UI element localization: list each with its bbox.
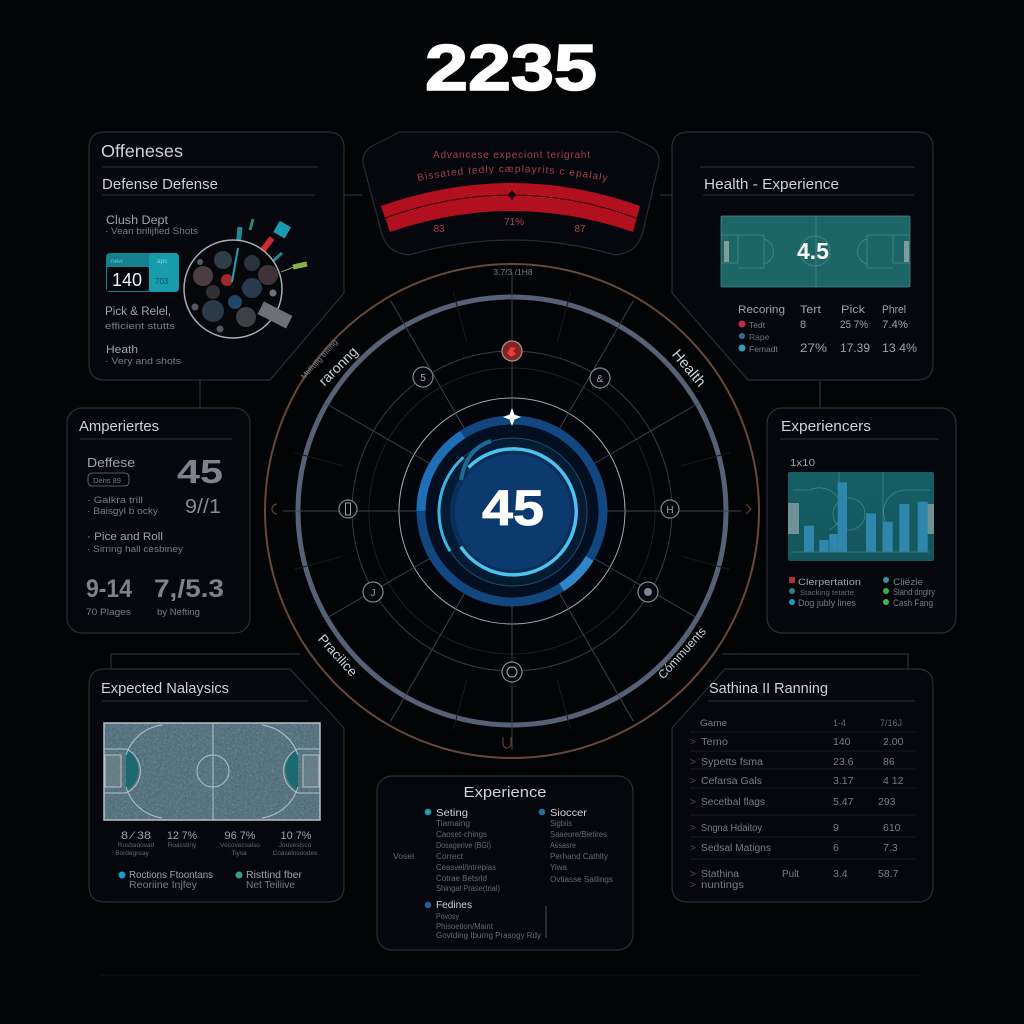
stamina table: Sypetts fsma [701,757,763,768]
red arc band [381,183,640,232]
bullet list: · Sirring hall cesbiney [87,544,184,554]
panel: health experience [672,132,933,380]
stat widget 140: apc [157,258,168,265]
stamina table [690,718,915,891]
stamina table: > [690,797,696,808]
list: soccer [539,808,613,884]
pitch stats: Jouvestsco [279,842,312,849]
gauge value: 45 [482,480,544,536]
bullet list [87,495,184,554]
speckled pitch [104,723,320,820]
data table: 8 [800,319,806,331]
stamina table: 610 [883,822,901,834]
ring label: practice: Pracilice [315,631,360,679]
gauge labels: 71% [504,217,524,228]
legend: Dog jubly lines [798,598,856,608]
stat widget 140 [106,253,179,292]
data table: Phrel [882,304,906,316]
text block: health: Heath [106,344,138,356]
data table: Pick [841,304,866,316]
pitch legend: Risttind fber [246,869,302,881]
defense label: Dens 89 [93,476,121,485]
data table: Tedt [749,320,766,330]
text block: pick and roll: efficient stutts [105,321,175,332]
heading: experience: Experience [464,784,546,801]
stamina table: > [690,880,696,891]
list: features: Phisoetion/Maint [436,922,494,931]
white inner ring [399,398,625,624]
stamina table: 140 [833,736,851,748]
stat widget 140: 140 [112,270,142,290]
stat 45: 45 [177,453,223,490]
list: features [425,900,546,940]
data table: 17.39 [840,341,870,355]
stamina table: Cefarsa Gals [701,776,762,787]
text block: clush dept: Clush Dept [106,215,169,227]
stat widget 140: 703 [155,277,169,286]
stamina table: 86 [883,756,895,768]
stamina table: 1-4 [833,718,846,728]
legend: Sland dnglry [893,587,935,597]
stamina table: 293 [878,796,896,808]
list: setting: Seting [436,808,468,819]
stamina table: 2.00 [883,736,904,748]
gauge icons: & [597,374,604,385]
stamina table: 3.17 [833,775,854,787]
stat 9-14: 70 Plages [86,607,131,618]
short ring spokes [399,398,625,624]
pitch stats: Rusbanovad [118,842,155,849]
list: soccer: Yiwa [550,863,568,872]
radial gauge [265,264,759,758]
list: soccer: Assasre [550,841,576,850]
stamina table: 9 [833,822,839,834]
gauge spokes [283,272,741,750]
legend: Cliëzle [893,577,923,587]
pitch stats: Tiysa [231,850,247,857]
data table [738,304,917,355]
bar chart on pitch [788,472,934,561]
heading: stamina running: Sathina II Ranning [709,681,828,697]
soccer pitch [721,216,910,287]
list: soccer: Saaeure/Bietires [550,830,607,839]
stamina table: Temo [701,737,728,748]
data table: 27% [800,341,827,355]
stamina table: Sedsal Matigns [701,843,771,854]
defense label: Deffese [87,455,135,470]
list: setting: Caoset-chings [436,830,487,839]
red caption: Advancese expeciont terigraht [433,150,590,161]
stat 7,/5.3: 7,/5.3 [154,575,224,603]
stamina table: > [690,869,696,880]
pitch legend: Reoriine Injfey [129,879,198,891]
pitch stats: Roasstiny [168,842,197,849]
list: soccer: Sigbiis [550,819,572,828]
list: setting: Shingal Prase(trial) [436,884,500,893]
heading: health experience: Health - Experience [704,177,839,193]
stamina table: 23.6 [833,756,854,768]
list: setting: Vosel [393,852,414,861]
list: setting: Correct [436,852,464,861]
list: soccer: Perhand Cathlty [550,852,608,861]
stamina table: Sngna Hdaitoy [701,823,762,834]
list: setting: Ceasvel/intrepias [436,863,496,872]
pitch stats: 12 7% [167,830,197,842]
list: setting: Cotrae Betsrld [436,874,487,883]
ring label top: 3.7/3 /1H8 [493,267,533,277]
stat 9-14: 9-14 [86,575,132,603]
pitch stats: Vecovecsaiso [220,842,260,849]
data table: 7.4% [882,319,908,331]
stamina table: 7.3 [883,842,898,854]
data table: 13 4% [882,341,917,355]
stamina table: 58.7 [878,868,899,880]
list: setting [393,808,500,893]
stamina table: 6 [833,842,839,854]
data table: 25 7% [840,319,868,331]
list: setting: Dosagerive (BGl) [436,841,491,850]
pitch legend: Net Teiliive [246,879,295,891]
gauge labels: 83 [433,224,445,235]
legend [789,577,935,608]
text block: health [105,344,181,367]
stat 9//1: 9//1 [185,496,221,518]
pitch legend: Roctions Ftoontans [129,869,213,881]
gauge icons [339,341,679,682]
stamina table: > [690,823,696,834]
star marker [503,408,521,426]
panel: experiencers [767,408,956,633]
stat 7,/5.3 [154,575,224,618]
pitch value: 4.5 [797,238,829,264]
stamina table: > [690,843,696,854]
gauge icons: 5 [420,373,426,384]
pitch stats [115,830,318,857]
ring label: comments: Cómmuents [655,624,709,682]
stamina table: Stathina [701,869,739,880]
text block: clush dept: · Vean brilijfied Shots [105,226,198,237]
ring label small: Mtilfullg tnlling [299,338,340,381]
stamina table: Pult [782,869,799,880]
chart label: 1x10 [790,457,815,469]
panel: expected analysis [89,669,344,902]
panel: stamina running [672,669,933,902]
text block: pick and roll: Pick & Relel, [105,306,171,318]
gauge icons: H [666,505,674,516]
data table: Recoring [738,304,785,316]
bullet list: · Galkra trill [87,495,143,505]
gauge labels [433,217,586,235]
data table: Tert [800,304,821,316]
list: soccer: Ovtiasse Satlings [550,875,613,884]
red caption curved: Bissated tedly cæplayrits c epalaly [418,164,608,182]
central blue dial [421,408,603,602]
heading: offenses: Offeneses [101,141,183,161]
heading: expected analysis: Expected Nalaysics [101,681,229,697]
panel: offenses [89,132,344,380]
text block: clush dept [105,215,198,237]
panel: experience [377,776,633,950]
pitch stats: 96 7% [224,830,256,842]
stamina table: 5.47 [833,796,854,808]
pitch stats: Bordegreay [115,850,150,857]
list: setting: Tiamaing [436,819,470,828]
stat 7,/5.3: by Nefting [157,607,200,618]
data table: Femadt [749,344,778,354]
legend: Stacking tetarte [800,588,854,597]
stamina table: > [690,757,696,768]
title: 2235 [425,31,597,104]
outer markers [272,504,751,748]
stamina table: 4 12 [883,775,904,787]
stamina table: > [690,776,696,787]
panel: advanced gauge [362,131,660,256]
pitch stats: 8 ⁄ 38 [121,830,151,842]
subheading: defense: Defense Defense [102,176,218,193]
legend: Clerpertation [798,577,861,587]
text block: health: · Very and shots [105,356,181,367]
data table: Rape [749,332,770,342]
list: features: Povosy [436,912,459,921]
legend: Cash Fang [893,598,933,608]
heading: experiencers: Experiencers [781,419,871,435]
bullet list: · Baisgyl b ocky [87,506,159,516]
list: features: Fedines [436,900,472,911]
cluster diagram [184,219,307,338]
gauge rings [265,264,759,758]
connector lines [100,195,920,975]
gauge labels: 87 [574,224,586,235]
list: features: Govtding Iburng Prasogy Rdy [436,931,541,940]
stamina table: > [690,737,696,748]
defense label [87,455,135,486]
ring label: health: Health [668,346,709,390]
bullet list: · Pice and Roll [87,531,163,543]
stamina table: Game [700,718,727,728]
pitch legend [118,869,302,891]
stat widget 140: new [111,258,123,265]
pitch stats: 10 7% [280,830,312,842]
stamina table: nuntings [701,880,744,891]
pitch stats: Coaselosoodes [273,850,318,857]
stamina table: 3.4 [833,868,848,880]
heading: amperiertes: Amperiertes [79,419,159,435]
list: soccer: Sioccer [550,808,588,819]
panel: amperiertes [67,408,250,633]
stamina table: Secetbal flags [701,797,765,808]
stat 9-14 [86,575,132,618]
gauge icons: J [370,588,376,599]
stamina table: 7/16J [880,718,902,728]
text block: pick and roll [105,306,175,332]
ring label: ratings: raronng [315,343,361,389]
